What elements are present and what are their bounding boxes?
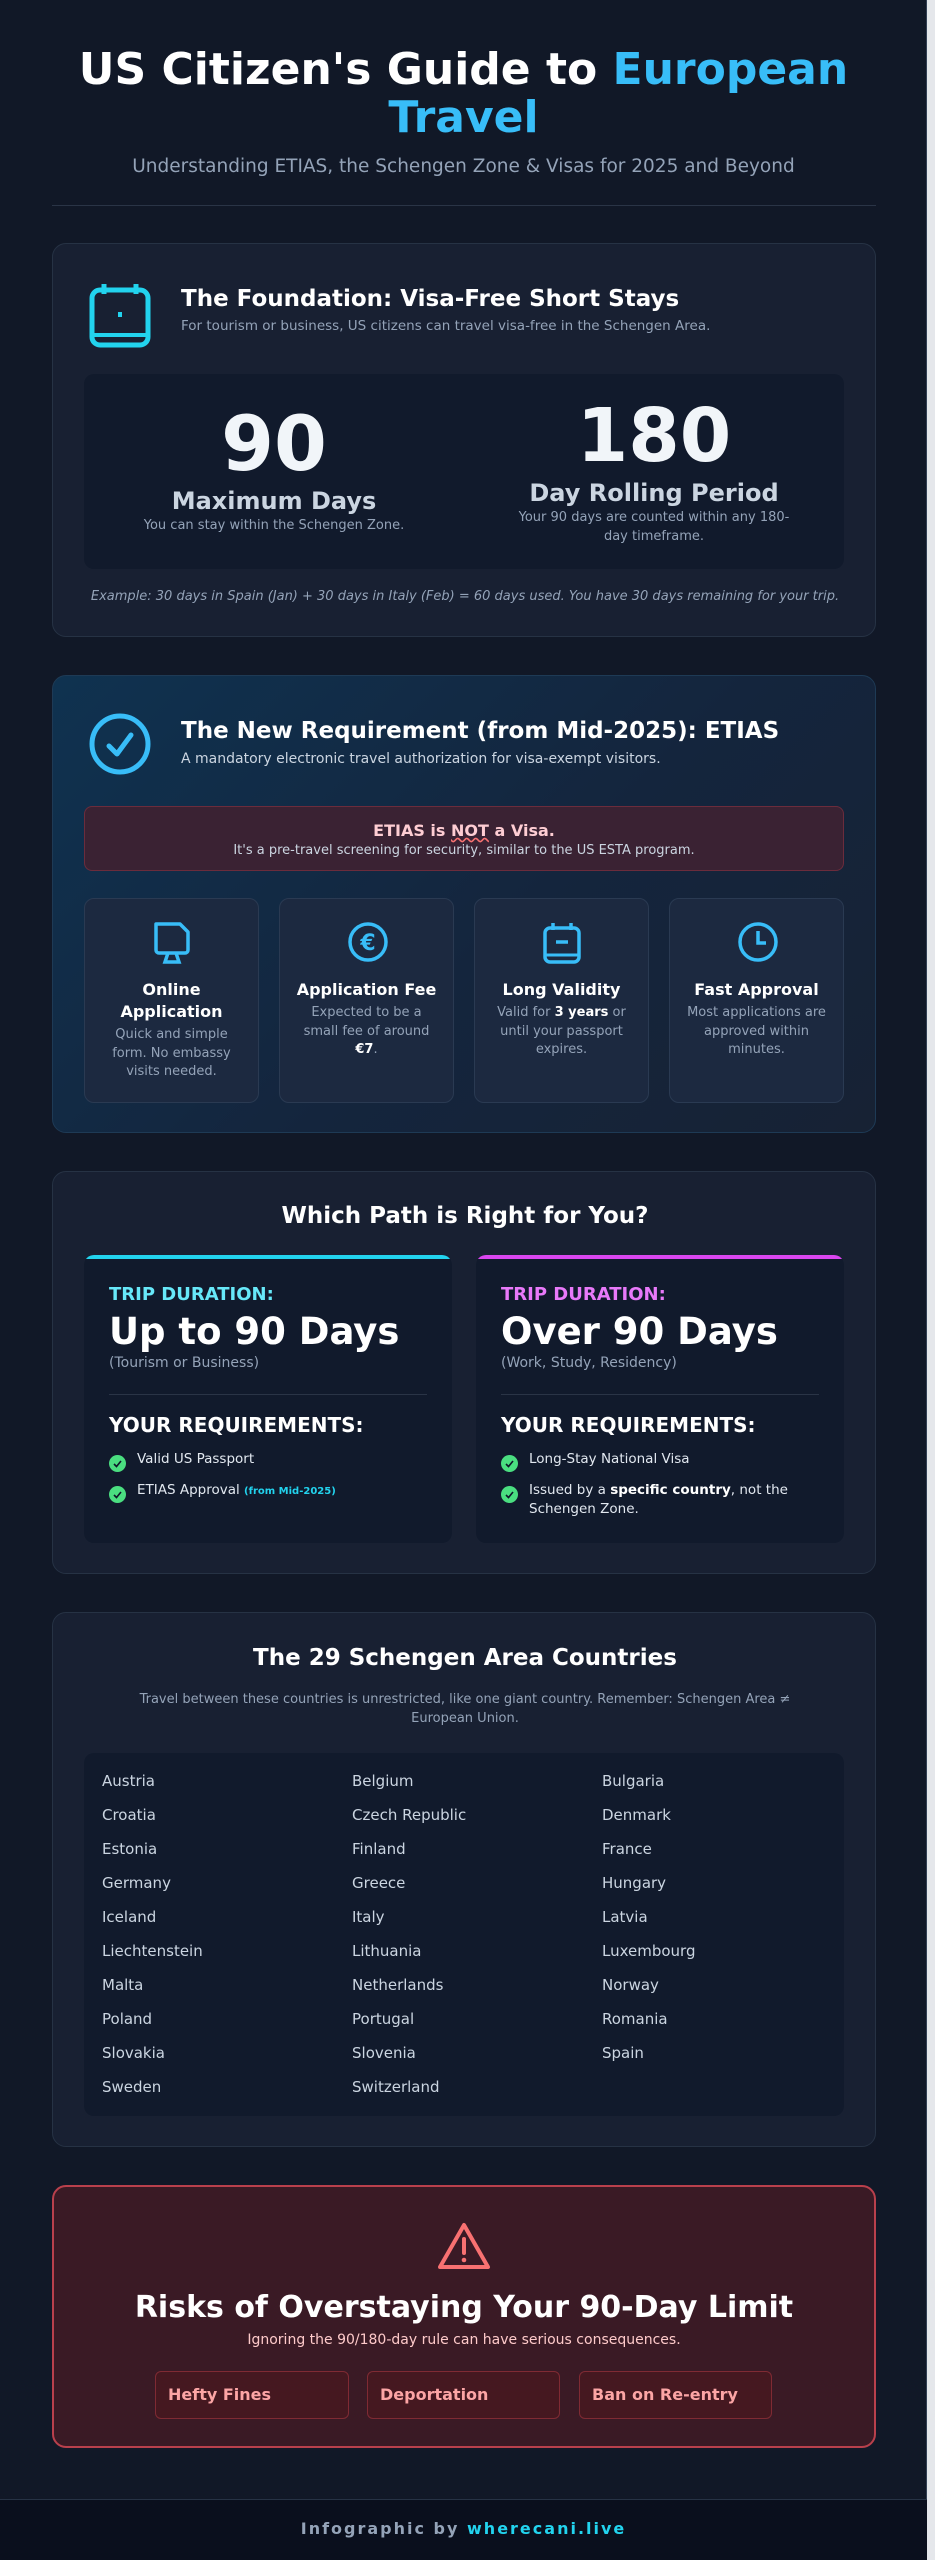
country list: Finland: [352, 1840, 406, 1858]
icon: check circle: [90, 714, 150, 774]
country list: [84, 1753, 844, 2116]
card: over 90 days: TRIP DURATION:: [501, 1284, 666, 1305]
country list: Iceland: [102, 1908, 156, 1926]
card: up to 90 days: TRIP DURATION:: [109, 1284, 274, 1305]
card: online application: [84, 898, 259, 1103]
country list: Sweden: [102, 2078, 161, 2096]
country list: Switzerland: [352, 2078, 440, 2096]
callout: not a visa: It's a pre-travel screening for security, similar to the US ESTA program.: [233, 843, 695, 858]
card: fast approval: Fast Approval: [694, 980, 819, 999]
title: US Citizen's Guide to European Travel: [79, 44, 848, 143]
card: online application: Application: [120, 1002, 223, 1021]
stat: 180 days: Day Rolling Period: [529, 479, 779, 507]
card: fast approval: [669, 898, 844, 1103]
stats box: [84, 374, 844, 569]
subheading: For tourism or business, US citizens can travel visa-free in the Schengen Area.: [181, 318, 710, 334]
stat: 180 days: [518, 393, 789, 544]
card: over 90 days: [476, 1255, 844, 1543]
card: over 90 days: (Work, Study, Residency): [501, 1355, 677, 1371]
card: up to 90 days: Up to 90 Days: [109, 1310, 399, 1353]
example note: Example: 30 days in Spain (Jan) + 30 days in Italy (Feb) = 60 days used. You have 30 days remaining for your trip.: [91, 589, 839, 604]
heading: Which Path is Right for You?: [281, 1203, 648, 1229]
stat: 90 days: Maximum Days: [172, 487, 376, 515]
heading: The 29 Schengen Area Countries: [253, 1645, 677, 1671]
heading: The New Requirement (from Mid-2025): ETIAS: [181, 718, 779, 744]
country list: Austria: [102, 1772, 155, 1790]
card: up to 90 days: ETIAS Approval (from Mid-2025): [137, 1482, 336, 1498]
risk: fines: Hefty Fines: [168, 2385, 271, 2404]
card: up to 90 days: (Tourism or Business): [109, 1355, 259, 1371]
country list: Lithuania: [352, 1942, 421, 1960]
card: fast approval: Most applications are approved within minutes.: [687, 1005, 826, 1057]
country list: Hungary: [602, 1874, 666, 1892]
country list: Portugal: [352, 2010, 414, 2028]
panel: schengen countries: [52, 1612, 876, 2147]
card: up to 90 days: Valid US Passport: [137, 1451, 254, 1467]
country list: France: [602, 1840, 652, 1858]
icon: euro: €: [359, 931, 376, 956]
icon: calendar: [543, 923, 581, 964]
card: up to 90 days: YOUR REQUIREMENTS:: [109, 1413, 364, 1437]
country list: Italy: [352, 1908, 385, 1926]
country list: Denmark: [602, 1806, 671, 1824]
callout: not a visa: [84, 806, 844, 871]
risk: re-entry ban: [579, 2371, 772, 2419]
card: application fee: Expected to be a small fee of around €7.: [304, 1005, 429, 1057]
card: over 90 days: Over 90 Days: [501, 1310, 778, 1353]
subheading: Ignoring the 90/180-day rule can have serious consequences.: [247, 2332, 681, 2348]
risk: deportation: [367, 2371, 560, 2419]
card: online application: Quick and simple form. No embassy visits needed.: [112, 1027, 231, 1079]
country list: Bulgaria: [602, 1772, 664, 1790]
stat: 90 days: 90: [221, 399, 327, 488]
country list: Estonia: [102, 1840, 157, 1858]
country list: Poland: [102, 2010, 152, 2028]
callout: not a visa: ETIAS is NOT a Visa.: [373, 821, 555, 840]
card: long validity: Long Validity: [503, 980, 620, 999]
country list: Malta: [102, 1976, 143, 1994]
country list: Liechtenstein: [102, 1942, 203, 1960]
country list: Netherlands: [352, 1976, 443, 1994]
card: up to 90 days: [84, 1255, 452, 1543]
panel: which path: [52, 1171, 876, 1574]
stat: 180 days: 180: [577, 393, 731, 479]
stat: 180 days: Your 90 days are counted within any 180-day timeframe.: [519, 510, 789, 544]
subtitle: Understanding ETIAS, the Schengen Zone & Visas for 2025 and Beyond: [132, 156, 795, 177]
country list: Belgium: [352, 1772, 414, 1790]
stat: 90 days: You can stay within the Schengen Zone.: [144, 518, 404, 533]
footer: Infographic by wherecani.live: [301, 2519, 626, 2538]
icon: calendar: [90, 284, 150, 348]
card: over 90 days: Issued by a specific country, not the Schengen Zone.: [529, 1482, 788, 1517]
subheading: Travel between these countries is unrestricted, like one giant country. Remember: Schengen Area ≠ European Union.: [140, 1692, 790, 1726]
country list: Slovenia: [352, 2044, 416, 2062]
country list: Greece: [352, 1874, 405, 1892]
card: long validity: Valid for 3 years or until your passport expires.: [497, 1005, 626, 1057]
country list: Czech Republic: [352, 1806, 466, 1824]
panel: ETIAS: [52, 675, 876, 1133]
icon: warning: [438, 2222, 490, 2269]
card: online application: Online: [142, 980, 201, 999]
heading: The Foundation: Visa-Free Short Stays: [181, 286, 679, 312]
country list: Germany: [102, 1874, 171, 1892]
card: application fee: [279, 898, 454, 1103]
card: over 90 days: YOUR REQUIREMENTS:: [501, 1413, 756, 1437]
card: over 90 days: Long-Stay National Visa: [529, 1451, 690, 1467]
risk: re-entry ban: Ban on Re-entry: [592, 2385, 738, 2404]
panel: risks of overstaying: [52, 2185, 876, 2448]
subheading: A mandatory electronic travel authorization for visa-exempt visitors.: [181, 751, 661, 767]
heading: Risks of Overstaying Your 90-Day Limit: [135, 2290, 793, 2325]
country list: Norway: [602, 1976, 659, 1994]
country list: Romania: [602, 2010, 668, 2028]
footer: [0, 2499, 927, 2560]
country list: Spain: [602, 2044, 644, 2062]
country list: Slovakia: [102, 2044, 165, 2062]
country list: Luxembourg: [602, 1942, 696, 1960]
risk: fines: [155, 2371, 349, 2419]
icon: monitor: [154, 922, 190, 964]
country list: Croatia: [102, 1806, 156, 1824]
icon: euro: [348, 922, 388, 962]
risk: deportation: Deportation: [380, 2385, 488, 2404]
icon: clock: [738, 922, 778, 962]
panel: visa-free short stays: [52, 243, 876, 637]
country list: Latvia: [602, 1908, 648, 1926]
stat: 90 days: [144, 399, 404, 533]
card: long validity: [474, 898, 649, 1103]
card: application fee: Application Fee: [297, 980, 436, 999]
